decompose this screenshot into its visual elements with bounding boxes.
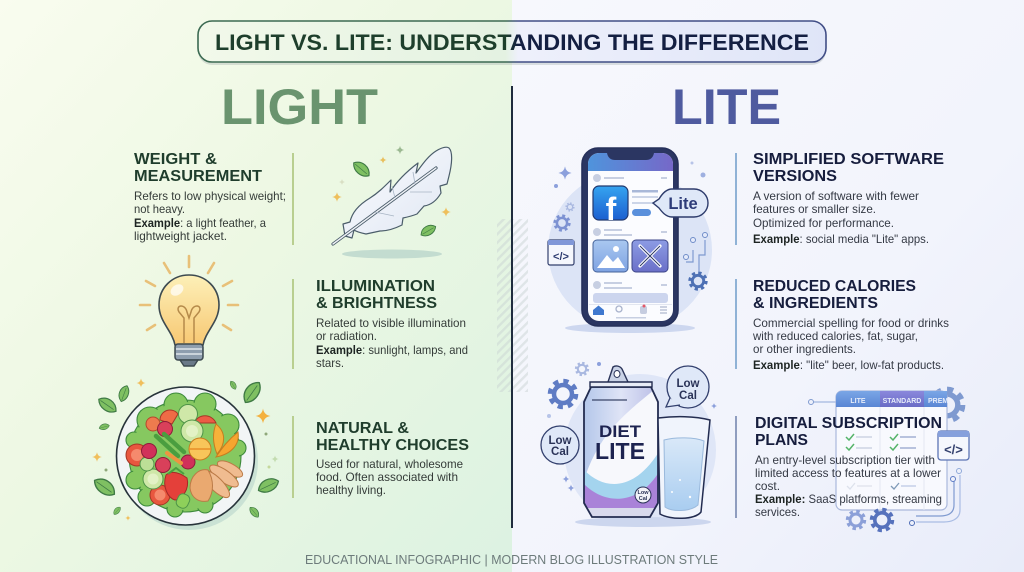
low cal bubble top: Low xyxy=(676,378,700,390)
section: simplified software versions: features or smaller size. xyxy=(753,202,876,216)
section: digital subscription plans: Example: SaaS platforms, streaming xyxy=(755,492,942,506)
section: simplified software versions: SIMPLIFIED SOFTWARE xyxy=(753,151,944,168)
lettuce bed xyxy=(126,393,246,517)
section: natural and healthy choices: HEALTHY CHOICES xyxy=(316,437,469,454)
heading: LIGHT: LIGHT xyxy=(221,79,378,135)
low cal bubble top: Cal xyxy=(679,390,697,402)
grilled chicken slices xyxy=(190,458,245,501)
title banner: LIGHT VS. LITE: UNDERSTANDING THE DIFFERENCE xyxy=(215,30,809,55)
low cal bubble left: Low xyxy=(548,435,572,447)
section: reduced calories and ingredients: or other ingredients. xyxy=(753,342,856,356)
section: digital subscription plans xyxy=(735,415,942,519)
section: simplified software versions: A version of software with fewer xyxy=(753,189,919,203)
subscription table illustration: </> xyxy=(944,442,963,457)
tools tile xyxy=(632,240,668,272)
section: reduced calories and ingredients: REDUCED CALORIES xyxy=(753,278,916,295)
heading: LITE: LITE xyxy=(672,79,781,135)
section: digital subscription plans: limited access to features at a lower xyxy=(755,466,941,480)
subscription table illustration: LITE xyxy=(850,398,866,405)
image tile xyxy=(593,240,628,272)
section: natural and healthy choices: Used for natural, wholesome xyxy=(316,457,463,471)
facebook tile: f xyxy=(606,191,617,227)
subscription table illustration: STANDARD xyxy=(883,398,921,405)
section: reduced calories and ingredients: Example: "lite" beer, low-fat products. xyxy=(753,358,944,372)
icon: salad plate xyxy=(91,378,281,530)
footer caption: EDUCATIONAL INFOGRAPHIC | MODERN BLOG ILLUSTRATION STYLE xyxy=(305,553,718,567)
section: weight and measurement: MEASUREMENT xyxy=(134,168,263,185)
garnish leaves xyxy=(91,378,281,521)
code window: </> xyxy=(553,251,569,263)
section: weight and measurement: Refers to low physical weight; xyxy=(134,189,286,203)
low cal bubble top xyxy=(666,366,709,408)
section: natural and healthy choices: NATURAL & xyxy=(316,420,409,437)
can: Cal xyxy=(639,496,648,502)
glass of water xyxy=(658,417,710,518)
section: simplified software versions: Example: social media "Lite" apps. xyxy=(753,232,929,246)
section: weight and measurement: Example: a light feather, a xyxy=(134,216,266,230)
code window xyxy=(548,240,574,265)
section: reduced calories and ingredients: Commercial spelling for food or drinks xyxy=(753,316,949,330)
gears and sparkles xyxy=(554,162,708,289)
subscription table illustration xyxy=(808,390,969,530)
subscription table illustration: PREM xyxy=(928,398,948,405)
section: digital subscription plans: PLANS xyxy=(755,432,808,449)
section: natural and healthy choices: healthy living. xyxy=(316,483,386,497)
facebook tile xyxy=(593,186,628,227)
icon: diet lite can and glass xyxy=(541,362,717,527)
section: illumination and brightness: ILLUMINATION xyxy=(316,278,435,295)
background: light side xyxy=(0,0,512,572)
section: weight and measurement: not heavy. xyxy=(134,202,185,216)
vegetables xyxy=(126,404,245,510)
low cal bubble left xyxy=(541,426,579,464)
can: LITE xyxy=(595,438,645,464)
bottom nav xyxy=(589,304,672,318)
background: lite side xyxy=(512,0,1024,572)
icon: smartphone with Lite app xyxy=(548,148,712,333)
section: reduced calories and ingredients xyxy=(735,278,949,372)
section: illumination and brightness: Example: sunlight, lamps, and xyxy=(316,343,468,357)
icon: light bulb xyxy=(140,256,238,366)
section: weight and measurement xyxy=(134,151,294,245)
section: weight and measurement: lightweight jacket. xyxy=(134,229,227,243)
can decorations xyxy=(547,362,717,492)
section: simplified software versions: VERSIONS xyxy=(753,168,837,185)
can: DIET xyxy=(599,422,642,441)
section: illumination and brightness: & BRIGHTNESS xyxy=(316,295,437,312)
icon: feather xyxy=(332,146,452,258)
section: illumination and brightness: stars. xyxy=(316,356,344,370)
section: digital subscription plans: DIGITAL SUBSCRIPTION xyxy=(755,415,942,432)
Lite speech bubble xyxy=(653,189,708,217)
low cal bubble left: Cal xyxy=(551,446,569,458)
section: digital subscription plans: cost. xyxy=(755,479,780,493)
section: digital subscription plans: services. xyxy=(755,505,800,519)
Lite speech bubble: Lite xyxy=(668,195,698,213)
title banner xyxy=(198,21,826,65)
section: weight and measurement: WEIGHT & xyxy=(134,151,217,168)
section: simplified software versions: Optimized for performance. xyxy=(753,216,894,230)
section: reduced calories and ingredients: & INGREDIENTS xyxy=(753,295,878,312)
can: Low xyxy=(638,490,649,496)
section: illumination and brightness xyxy=(292,278,468,370)
section: illumination and brightness: or radiation. xyxy=(316,329,377,343)
section: simplified software versions xyxy=(735,151,944,246)
app feed rows xyxy=(593,174,668,303)
section: natural and healthy choices: food. Often associated with xyxy=(316,470,458,484)
can xyxy=(584,366,660,520)
section: reduced calories and ingredients: with reduced calories, fat, sugar, xyxy=(752,329,918,343)
section: digital subscription plans: An entry-level subscription tier with xyxy=(755,453,935,467)
section: illumination and brightness: Related to visible illumination xyxy=(316,316,466,330)
section: natural and healthy choices xyxy=(292,416,469,498)
